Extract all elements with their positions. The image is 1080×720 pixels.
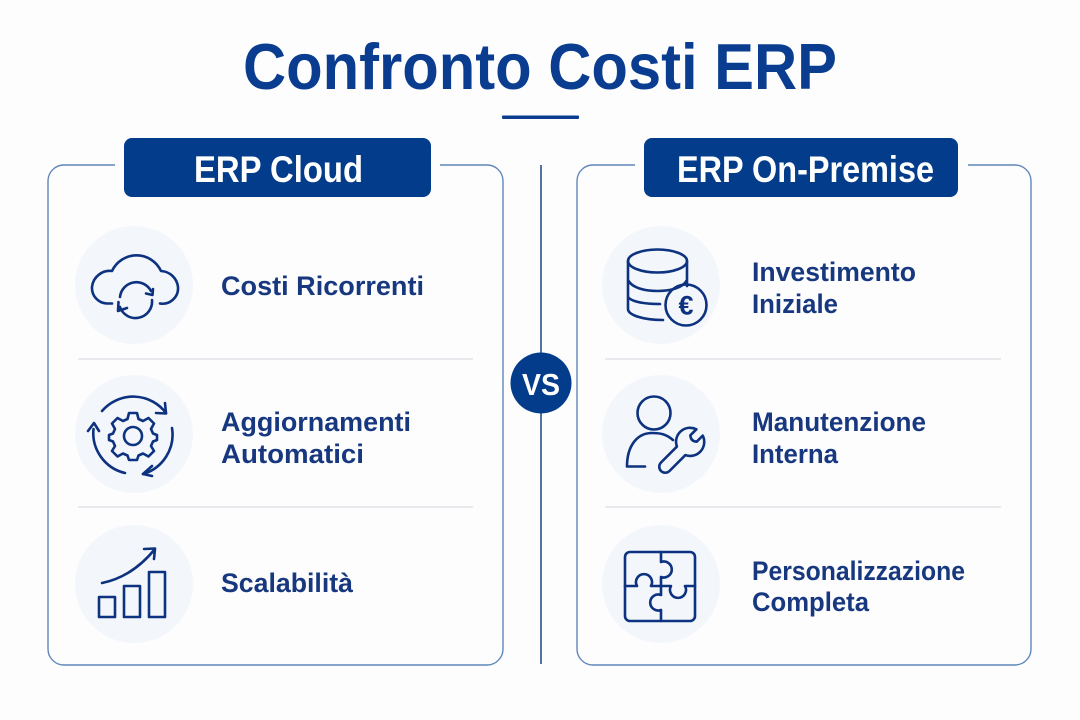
VS badge	[510, 352, 572, 414]
icon: cloud with sync arrows	[75, 226, 193, 344]
row: Manutenzione Interna: Interna	[752, 439, 839, 469]
VS badge: VS	[522, 367, 560, 402]
header: ERP On-Premise	[644, 138, 958, 197]
panel: ERP Cloud	[48, 138, 503, 665]
row: Personalizzazione Completa	[602, 525, 965, 643]
row: Aggiornamenti Automatici: Automatici	[221, 439, 364, 469]
panel: ERP On-Premise	[577, 138, 1031, 665]
title underline	[502, 116, 579, 119]
row: Aggiornamenti Automatici	[75, 375, 411, 493]
row: Manutenzione Interna	[602, 375, 926, 493]
row: Personalizzazione Completa: Completa	[752, 587, 870, 617]
row: Investimento Iniziale	[602, 226, 916, 344]
header: ERP On-Premise: ERP On-Premise	[677, 149, 934, 190]
icon: database with euro coin: €	[678, 290, 694, 320]
label: Aggiornamenti	[221, 407, 411, 437]
header: ERP Cloud: ERP Cloud	[194, 149, 363, 190]
icon: person with wrench	[602, 375, 720, 493]
label: Scalabilità	[221, 568, 354, 598]
label: Personalizzazione	[752, 556, 965, 586]
panel frame: on-premise	[577, 165, 1031, 665]
row: Costi Ricorrenti	[75, 226, 424, 344]
icon: growth bars	[75, 525, 193, 643]
label: Costi Ricorrenti	[221, 271, 424, 301]
row: Investimento Iniziale: Iniziale	[752, 289, 838, 319]
title: Confronto Costi ERP	[243, 30, 837, 103]
panel frame: cloud	[48, 165, 503, 665]
central divider	[540, 165, 542, 664]
label: Manutenzione	[752, 407, 926, 437]
label: Investimento	[752, 257, 916, 287]
row: Scalabilità	[75, 525, 354, 643]
icon: gear with cycle arrows	[75, 375, 193, 493]
icon: database with euro coin	[602, 226, 720, 344]
header: ERP Cloud	[124, 138, 431, 197]
icon: puzzle	[602, 525, 720, 643]
